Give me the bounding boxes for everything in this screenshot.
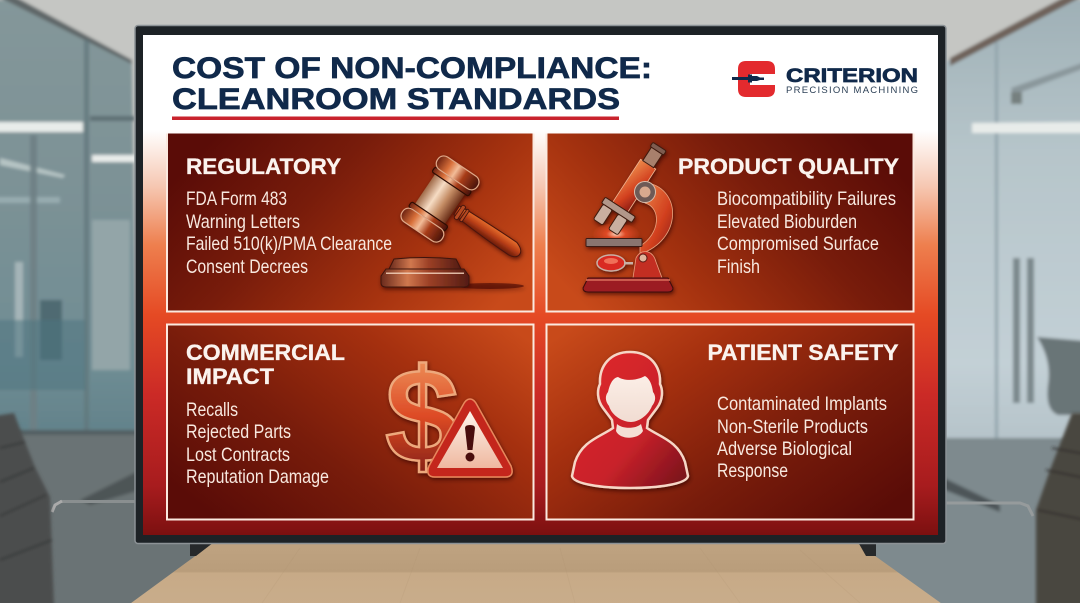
text block: patient safety items: Contaminated Implants [717, 393, 887, 415]
icon: dollar sign with warning triangle: $ [385, 342, 460, 491]
heading: patient safety: PATIENT SAFETY [708, 340, 899, 365]
text block: regulatory items: Consent Decrees [186, 256, 308, 278]
icon: person [572, 352, 688, 488]
text block: commercial items: Lost Contracts [186, 444, 290, 466]
icon: dollar sign with warning triangle [385, 342, 512, 491]
panel: product quality [546, 134, 914, 312]
title: COST OF NON-COMPLIANCE: [172, 52, 652, 85]
text block: product quality items: Finish [717, 256, 760, 278]
icon: microscope [583, 137, 675, 292]
text block: product quality items: Biocompatibility Failures [717, 188, 896, 210]
right foreground chair [1036, 413, 1080, 603]
text block: product quality items: Elevated Bioburden [717, 211, 857, 233]
display monitor [135, 26, 946, 544]
text block: regulatory items: Warning Letters [186, 211, 300, 233]
heading: commercial impact: IMPACT [186, 364, 275, 389]
text block: product quality items [717, 188, 896, 278]
text block: patient safety items: Adverse Biological [717, 438, 852, 460]
logo tagline: PRECISION MACHINING [786, 85, 918, 96]
panel: regulatory [167, 134, 542, 312]
text block: commercial items: Rejected Parts [186, 421, 291, 443]
text block: regulatory items: Failed 510(k)/PMA Clearance [186, 233, 392, 255]
text block: product quality items: Compromised Surface [717, 233, 879, 255]
heading: regulatory: REGULATORY [186, 154, 341, 179]
logo wordmark: CRITERION [786, 66, 918, 87]
heading: commercial impact [186, 340, 345, 389]
conference table [127, 543, 945, 603]
heading: product quality: PRODUCT QUALITY [678, 154, 899, 179]
icon: red C with spindle [732, 61, 775, 97]
heading: commercial impact: COMMERCIAL [186, 340, 345, 365]
text block: regulatory items: FDA Form 483 [186, 188, 287, 210]
text block: patient safety items: Response [717, 460, 788, 482]
table legs and rails [52, 500, 1033, 556]
icon: gavel [381, 153, 542, 289]
text block: commercial items: Reputation Damage [186, 466, 329, 488]
left foreground chair [0, 413, 54, 603]
text block: patient safety items [717, 393, 887, 482]
text block: commercial items: Recalls [186, 399, 238, 421]
text block: commercial items [186, 399, 329, 488]
logo: Criterion Precision Machining [732, 61, 918, 97]
text block: regulatory items [186, 188, 392, 278]
panel: patient safety [546, 324, 914, 520]
text block: patient safety items: Non-Sterile Products [717, 416, 868, 438]
title [172, 52, 652, 120]
title: CLEANROOM STANDARDS [172, 83, 620, 116]
panel: commercial impact [167, 324, 534, 520]
